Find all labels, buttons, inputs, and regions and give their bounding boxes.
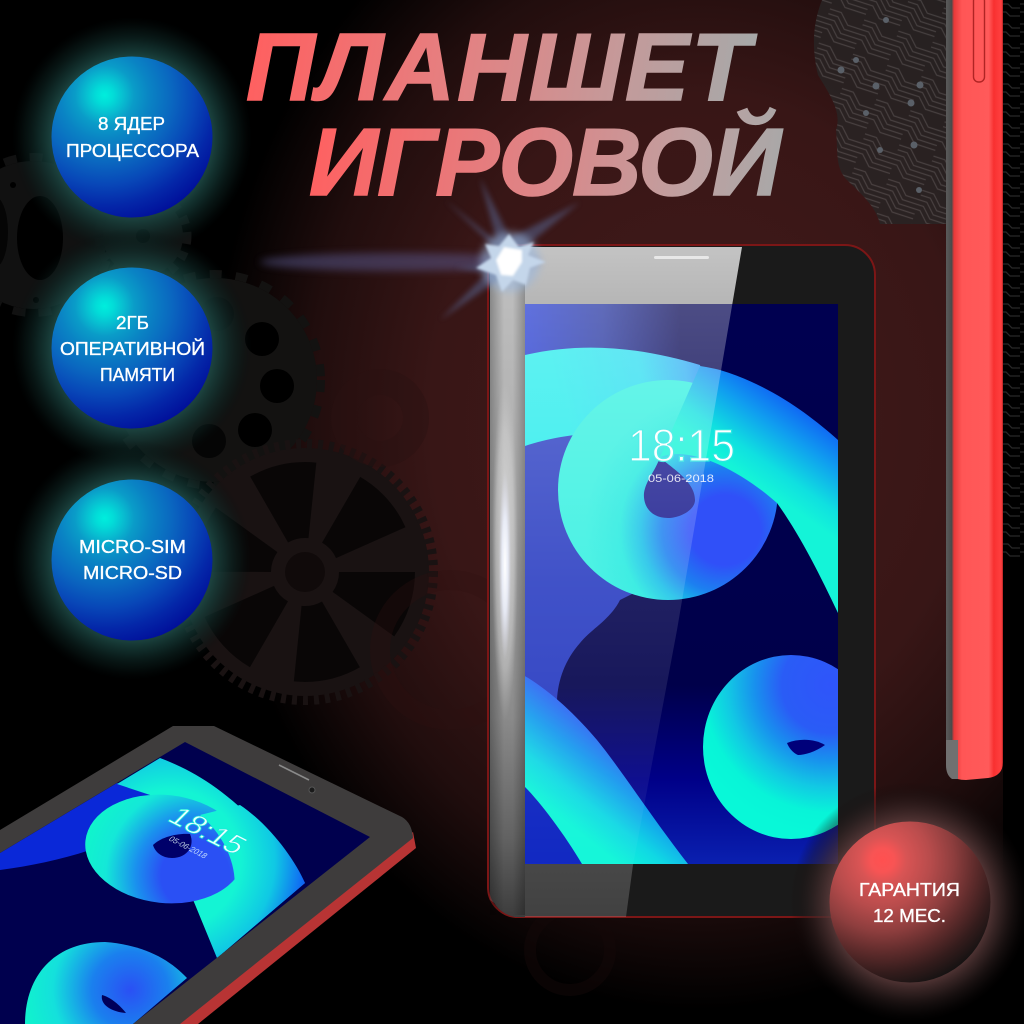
badge: 2 GB RAM — [12, 228, 252, 468]
main tablet — [488, 245, 879, 917]
badge: 8 cores: ПРОЦЕССОРА — [66, 141, 199, 161]
badge: 2 GB RAM: 2ГБ — [116, 313, 149, 333]
badge: warranty: ГАРАНТИЯ — [859, 880, 960, 900]
tablet red edge — [178, 832, 416, 1024]
gear: holes — [109, 274, 321, 486]
badge: 8 cores: 8 ЯДЕР — [98, 114, 165, 134]
title — [246, 14, 783, 216]
lock screen clock: 18:15 — [628, 420, 735, 471]
lock screen clock: 05-06-2018 — [648, 473, 714, 485]
angled tablet — [0, 726, 416, 1024]
gear: small — [99, 192, 187, 280]
lens flare — [260, 178, 580, 320]
speaker slot — [654, 256, 709, 259]
side view of tablet — [946, 0, 1003, 780]
tilted screen — [0, 742, 372, 1024]
gear: large spoked — [177, 444, 433, 700]
badge: 8 cores — [12, 17, 252, 257]
tilted speaker — [279, 765, 309, 780]
badge: warranty — [790, 782, 1024, 1022]
tilted camera — [309, 787, 315, 793]
tablet body — [0, 726, 413, 1024]
gear: top left — [0, 157, 111, 313]
background gears — [0, 157, 610, 990]
badge: warranty: 12 МЕС. — [873, 906, 946, 926]
tilted date: 05-06-2018 — [167, 835, 210, 860]
glass reflection — [490, 247, 742, 917]
badge: sim and sd — [12, 440, 252, 680]
title line 2: ИГРОВОЙ — [309, 107, 783, 216]
circuit head pattern top right — [814, 0, 946, 224]
badge: sim and sd: MICRO-SIM — [79, 537, 186, 557]
badge: sim and sd: MICRO-SD — [83, 563, 182, 583]
screen wallpaper — [525, 304, 838, 864]
title line 1: ПЛАНШЕТ — [246, 14, 757, 121]
badge: 2 GB RAM: ПАМЯТИ — [100, 365, 175, 385]
tilted clock: 18:15 — [161, 802, 254, 860]
faint gears on red — [344, 382, 610, 990]
badge: 2 GB RAM: ОПЕРАТИВНОЙ — [60, 338, 205, 359]
left bezel highlight — [490, 247, 525, 917]
tablet body — [488, 245, 875, 917]
